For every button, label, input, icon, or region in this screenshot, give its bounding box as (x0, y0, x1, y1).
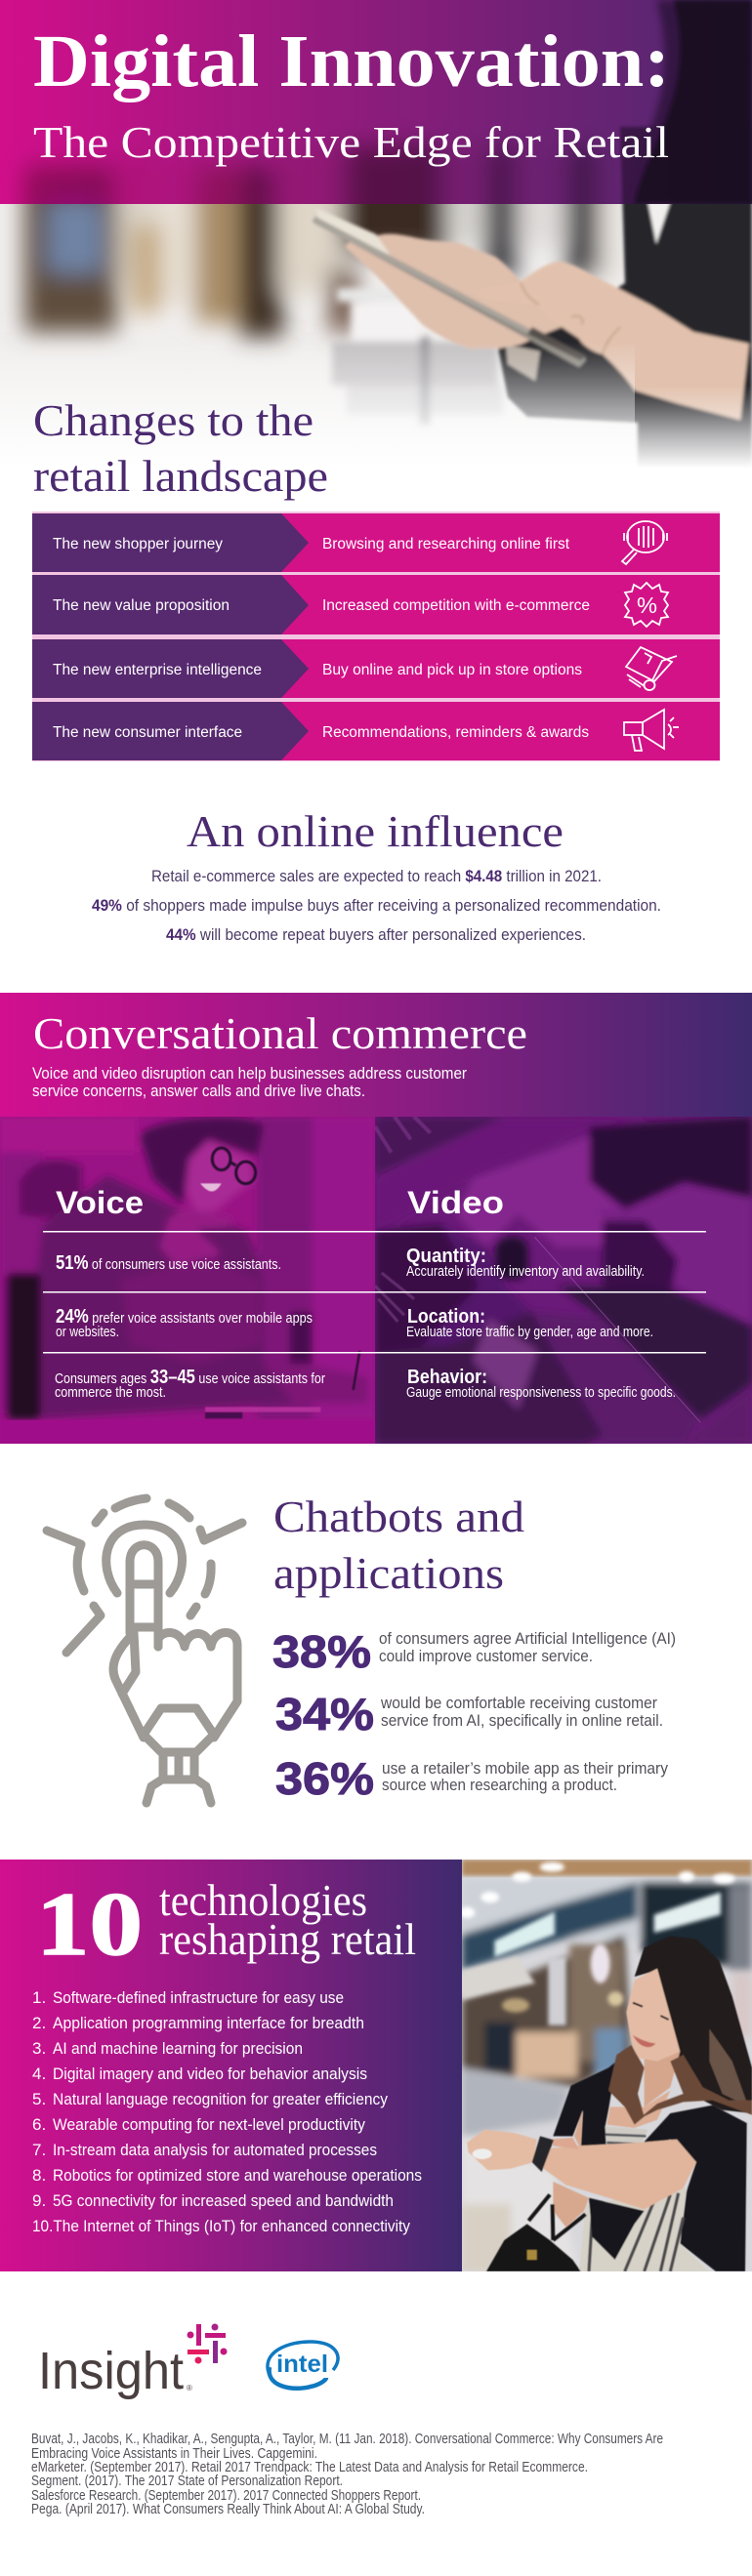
hair back (635, 1936, 752, 2113)
heading: changes to the retail landscape (33, 396, 328, 501)
text block: video: Accurately identify inventory and availability. (406, 1264, 645, 1280)
heading: chatbots and applications: Chatbots and (273, 1492, 524, 1541)
stat: 38 percent: 38% (272, 1626, 371, 1677)
text block: voice: or websites. (56, 1324, 119, 1340)
list: ten technologies: 5. (32, 2090, 46, 2108)
black cardigan (553, 2062, 616, 2157)
title: The Competitive Edge for Retail (33, 117, 669, 167)
heading: an online influence: An online influence (187, 806, 564, 856)
photo: overhead store security camera view, purple duotone (375, 1117, 752, 1444)
logo: Insight: ® (187, 2384, 192, 2392)
heading: 10 technologies: 10 (36, 1874, 143, 1974)
stat: 38 percent: could improve customer service. (379, 1647, 593, 1665)
left hand (345, 234, 562, 348)
list: ten technologies: 7. (32, 2141, 46, 2159)
row: shopper journey (32, 513, 720, 572)
stat: 36 percent (275, 1753, 668, 1804)
stat: 34 percent (275, 1689, 663, 1739)
list: ten technologies: 6. (32, 2115, 46, 2134)
text block: video: Quantity: (406, 1246, 486, 1267)
text block: online influence statistics (92, 867, 661, 944)
logo: Intel (268, 2342, 338, 2389)
hand (467, 2130, 537, 2170)
text block: references: eMarketer. (September 2017). Retail 2017 Trendpack: The Latest Data and Analysis for Retail Ecommerce. (31, 2460, 588, 2475)
row: enterprise intelligence: Buy online and pick up in store options (322, 662, 582, 678)
title: Digital Innovation: (33, 20, 670, 102)
panel: conversational commerce header: Conversational commerce (33, 1008, 527, 1058)
list: ten technologies: 10.The Internet of Things (IoT) for enhanced connectivity (32, 2217, 410, 2235)
heading: changes to the retail landscape: Changes to the (33, 396, 313, 445)
text block: references: Pega. (April 2017). What Consumers Really Think About AI: A Global Study. (31, 2502, 425, 2517)
stat: 36 percent: 36% (275, 1753, 374, 1804)
text block: voice (55, 1185, 325, 1401)
row: value proposition (32, 575, 720, 634)
jacket (498, 127, 752, 469)
forearm (543, 2140, 696, 2209)
logo: Intel: intel (276, 2351, 328, 2378)
list: ten technologies: Natural language recognition for greater efficiency (53, 2090, 388, 2108)
photo: woman with glasses talking on phone, magenta duotone (0, 1117, 375, 1444)
text block: online influence statistics: 44% will become repeat buyers after personalized experiences. (166, 925, 586, 944)
text block: references: Segment. (2017). The 2017 State of Personalization Report. (31, 2474, 343, 2489)
list: ten technologies: 8. (32, 2166, 46, 2185)
list: ten technologies: 1. (32, 1988, 46, 2007)
list: ten technologies: 9. (32, 2191, 46, 2210)
list: ten technologies: 2. (32, 2014, 46, 2032)
text block: voice: Voice (56, 1185, 144, 1220)
stat: 38 percent: of consumers agree Artificial Intelligence (AI) (379, 1629, 676, 1648)
list: ten technologies: Software-defined infrastructure for easy use (53, 1988, 344, 2007)
stat: 36 percent: source when researching a product. (382, 1776, 617, 1794)
list: ten technologies: 3. (32, 2039, 46, 2058)
list: ten technologies: 5G connectivity for increased speed and bandwidth (53, 2191, 394, 2210)
lower arm behind (553, 2182, 589, 2228)
text block: references: Salesforce Research. (September 2017). 2017 Connected Shoppers Report. (31, 2488, 421, 2504)
row: shopper journey: The new shopper journey (53, 536, 223, 552)
row: consumer interface: Recommendations, reminders & awards (322, 724, 589, 741)
heading: chatbots and applications: applications (273, 1548, 504, 1598)
text block: voice: commerce the most. (55, 1384, 166, 1401)
icon: robot hand pressing a touch point (47, 1498, 242, 1803)
heading: chatbots and applications (273, 1492, 524, 1598)
chest (606, 2091, 670, 2128)
panel: four retail changes rows (32, 511, 720, 761)
neck (645, 2052, 680, 2106)
row: value proposition: Increased competition with e-commerce (322, 597, 590, 614)
text block: online influence statistics: 49% of shoppers made impulse buys after receiving a personalized recommendation. (92, 896, 661, 915)
list: ten technologies: Robotics for optimized store and warehouse operations (53, 2166, 422, 2185)
list: ten technologies: In-stream data analysis for automated processes (53, 2141, 377, 2159)
text block: video: Video (407, 1185, 504, 1220)
list: ten technologies: Wearable computing for next-level productivity (53, 2115, 365, 2134)
icon: magnifier scanning a barcode (622, 521, 667, 564)
stat: 34 percent: service from AI, specifically in online retail. (381, 1711, 663, 1730)
panel: conversational commerce header (0, 993, 752, 1117)
stat: 36 percent: use a retailer’s mobile app as their primary (382, 1759, 668, 1778)
icon: hand truck with parcel (626, 647, 677, 690)
text block: voice: 51% of consumers use voice assistants. (56, 1252, 281, 1274)
phone (315, 208, 391, 256)
panel: conversational commerce header: service concerns, answer calls and drive live chats. (32, 1082, 365, 1100)
text block: video: Location: (407, 1306, 485, 1328)
stat: 34 percent: would be comfortable receiving customer (380, 1694, 657, 1712)
logo: Insight: Insight (38, 2342, 184, 2400)
heading: 10 technologies: reshaping retail (159, 1914, 416, 1964)
face (626, 1969, 680, 2062)
row: consumer interface (32, 702, 720, 760)
text block: video: Gauge emotional responsiveness to specific goods. (406, 1385, 676, 1401)
text block: video: Evaluate store traffic by gender, age and more. (406, 1325, 653, 1340)
striped top (604, 2125, 648, 2144)
right hand (521, 261, 752, 422)
title (33, 20, 670, 167)
text block: video (406, 1185, 676, 1401)
text block: voice: 24% prefer voice assistants over mobile apps (56, 1306, 313, 1328)
stat: 34 percent: 34% (275, 1689, 374, 1739)
text block: video: Behavior: (407, 1367, 487, 1388)
row: consumer interface: The new consumer interface (53, 724, 242, 741)
text block: references (31, 2432, 663, 2517)
icon: megaphone (624, 710, 679, 751)
handbag (486, 2224, 581, 2271)
wavy hair right (638, 2055, 752, 2120)
panel: conversational commerce header: Voice and video disruption can help businesses address customer (32, 1064, 467, 1083)
row: enterprise intelligence (32, 639, 720, 698)
list: ten technologies (32, 1988, 422, 2235)
row: shopper journey: Browsing and researching online first (322, 536, 570, 552)
heading: 10 technologies (36, 1874, 416, 1974)
heading: 10 technologies: technologies (159, 1875, 367, 1925)
row: enterprise intelligence: The new enterprise intelligence (53, 662, 262, 678)
text block: voice: Consumers ages 33–45 use voice assistants for (55, 1367, 325, 1388)
divider lines across voice and video panels (43, 1231, 706, 1353)
panel: 10 technologies reshaping retail (0, 1860, 462, 2271)
list: ten technologies: 4. (32, 2065, 46, 2083)
stat: 38 percent (272, 1626, 676, 1677)
hanging cardigan knot (589, 2198, 645, 2260)
row: value proposition: The new value proposition (53, 597, 230, 614)
icon: discount badge: % (637, 593, 657, 618)
icon: discount badge (625, 583, 668, 627)
heading: changes to the retail landscape: retail landscape (33, 452, 328, 501)
panel: hero photo of hands using a smartphone in a clothing store (0, 0, 752, 469)
list: ten technologies: Digital imagery and video for behavior analysis (53, 2065, 367, 2083)
logo: Insight (38, 2323, 227, 2400)
list: ten technologies: Application programming interface for breadth (53, 2014, 364, 2032)
list: ten technologies: AI and machine learning for precision (53, 2039, 303, 2058)
text block: online influence statistics: Retail e-commerce sales are expected to reach $4.48 trillion in 2021. (151, 867, 602, 885)
text block: references: Embracing Voice Assistants in Their Lives. Capgemini. (31, 2446, 317, 2462)
wavy hair left (608, 2045, 645, 2125)
photo: woman checking her smartwatch in a shopping mall (459, 1860, 752, 2271)
